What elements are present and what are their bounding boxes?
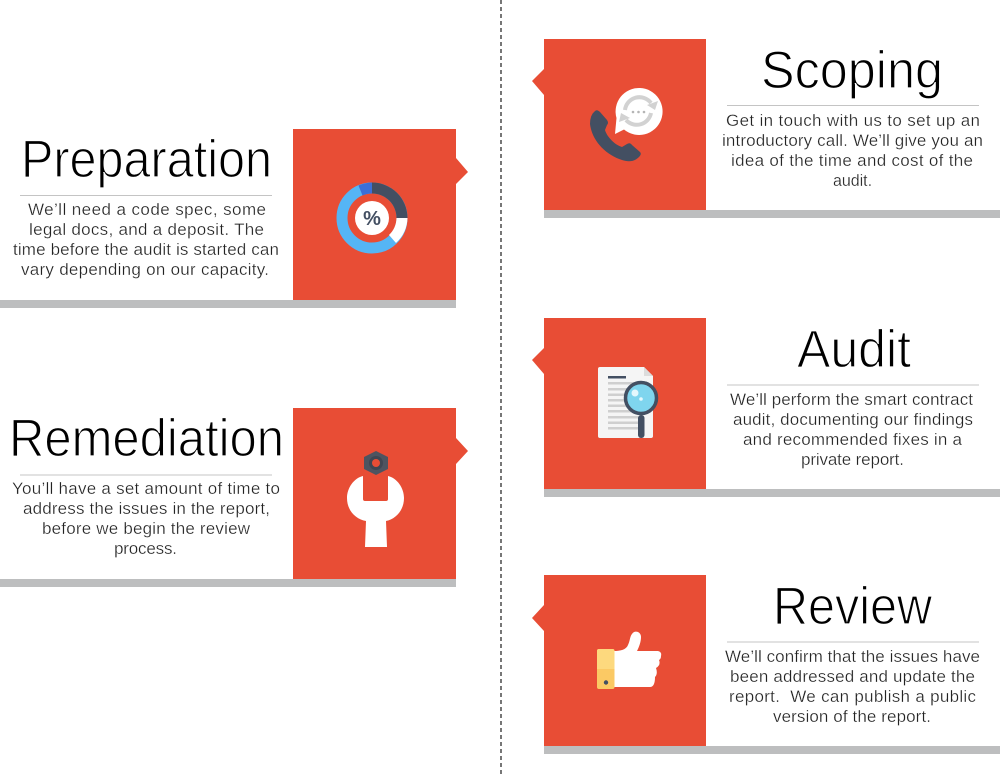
gray base bar: remediation <box>0 579 456 587</box>
red icon tile: remediation <box>293 408 468 579</box>
icon: percent donut <box>342 182 408 248</box>
panel: remediation <box>0 408 468 587</box>
gray base bar: audit <box>544 489 1000 497</box>
icon: percent donut: % <box>363 208 381 230</box>
panel: audit <box>532 318 1000 497</box>
text block: scoping: Get in touch with us to set up an <box>726 111 980 130</box>
icon: phone with speech bubble <box>590 88 663 161</box>
gray base bar: scoping <box>544 210 1000 218</box>
icon: thumbs up <box>597 632 661 689</box>
heading: remediation: Remediation <box>9 409 284 468</box>
text block: review: report. We can publish a public <box>729 687 976 706</box>
panel: review <box>532 575 1000 754</box>
text block: audit: audit, documenting our findings <box>733 410 973 429</box>
heading: audit: Audit <box>797 320 911 379</box>
text block: scoping: introductory call. We’ll give you an <box>722 131 983 150</box>
gray base bar: preparation <box>0 300 456 308</box>
heading: scoping: Scoping <box>761 41 943 100</box>
text block: remediation: process. <box>114 539 177 558</box>
text block: review <box>725 647 980 726</box>
text block: audit: We’ll perform the smart contract <box>730 390 973 409</box>
text block: preparation <box>13 200 279 279</box>
red icon tile: review <box>532 575 706 746</box>
red icon tile: scoping <box>532 39 706 210</box>
text block: audit: private report. <box>801 450 904 469</box>
text block: remediation: You’ll have a set amount of time to <box>12 479 280 498</box>
text block: scoping: audit. <box>833 171 872 190</box>
panel: preparation <box>0 129 468 308</box>
icon: document with magnifier <box>598 367 656 438</box>
text block: audit <box>730 390 973 469</box>
heading: review: Review <box>773 577 933 636</box>
icon: wrench and nut <box>347 451 404 547</box>
panel: scoping <box>532 39 1000 218</box>
text block: scoping: idea of the time and cost of the <box>731 151 973 170</box>
text block: remediation <box>12 479 280 558</box>
text block: preparation: legal docs, and a deposit. The <box>29 220 264 239</box>
heading: preparation: Preparation <box>21 130 272 189</box>
gray base bar: review <box>544 746 1000 754</box>
text block: scoping <box>722 111 983 190</box>
text block: review: We’ll confirm that the issues have <box>725 647 980 666</box>
text block: preparation: vary depending on our capacity. <box>21 260 269 279</box>
red icon tile: audit <box>532 318 706 489</box>
red icon tile: preparation <box>293 129 468 300</box>
text block: remediation: before we begin the review <box>42 519 251 538</box>
text block: preparation: We’ll need a code spec, some <box>28 200 266 219</box>
text block: audit: and recommended fixes in a <box>743 430 963 449</box>
text block: preparation: time before the audit is started can <box>13 240 279 259</box>
text block: remediation: address the issues in the report, <box>23 499 270 518</box>
text block: review: version of the report. <box>773 707 931 726</box>
text block: review: been addressed and update the <box>730 667 975 686</box>
